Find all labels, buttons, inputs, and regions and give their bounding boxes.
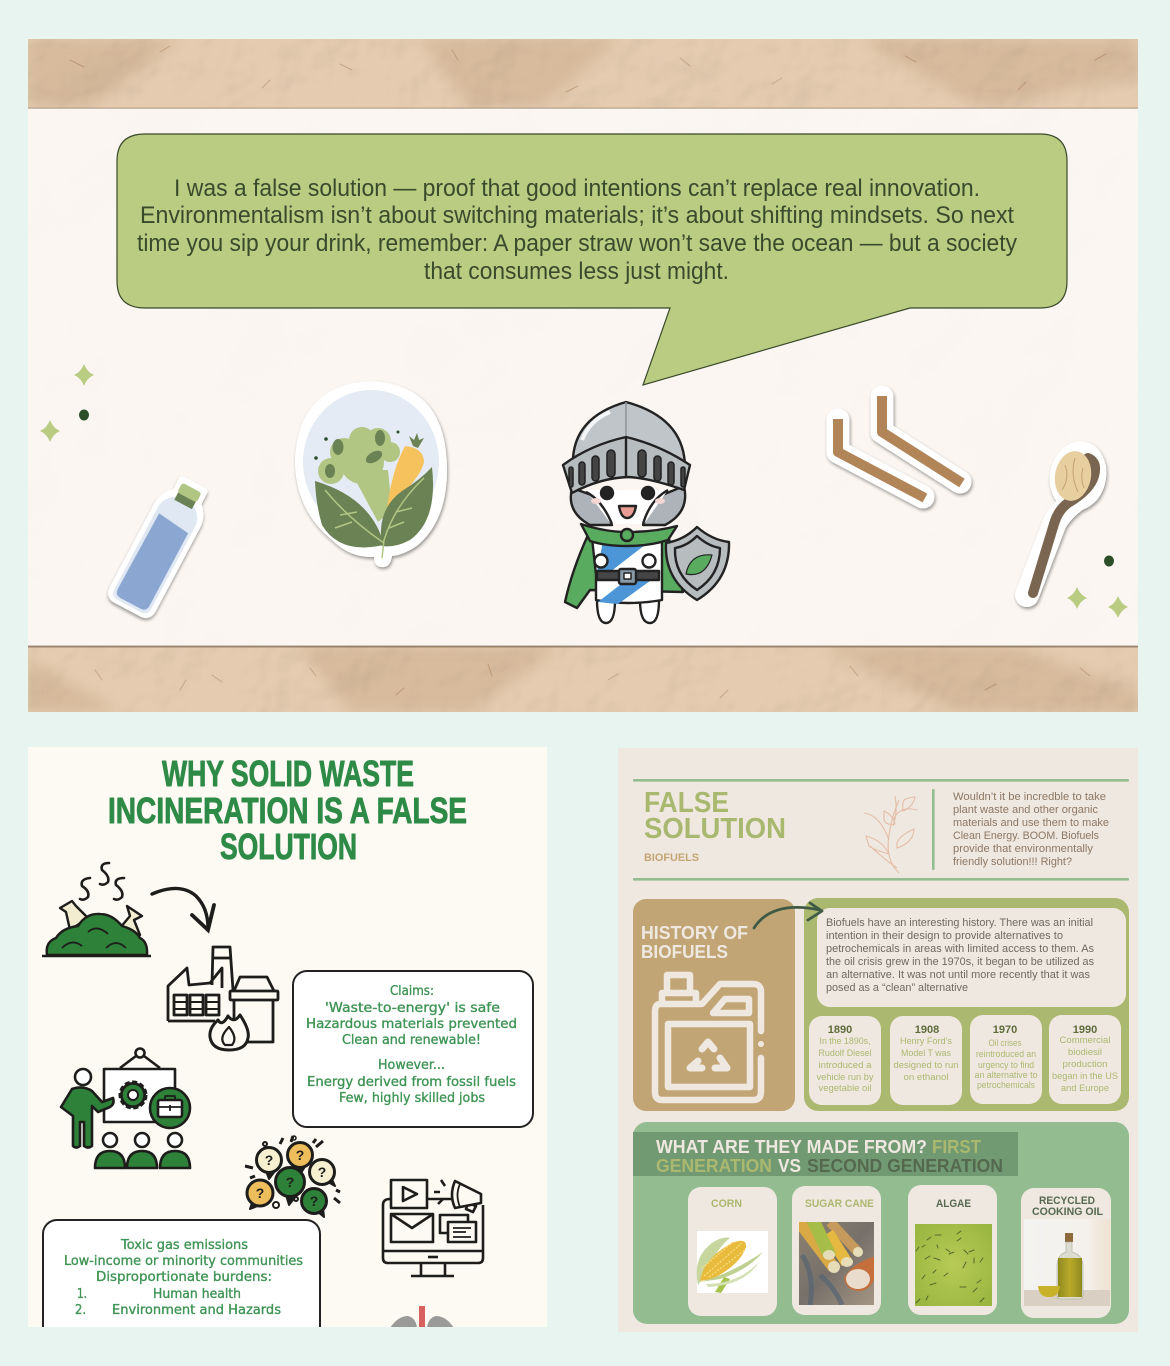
speech bubble: Environmentalism isn’t about switching materials; it’s about shifting mindsets. So next: [140, 202, 1014, 229]
claims callout: Few, highly skilled jobs: [339, 1091, 485, 1106]
card: 1990: Commercial: [1060, 1035, 1110, 1045]
panel: paper speech poster: [28, 39, 1138, 712]
icon: sparkles and dot left: [40, 364, 94, 442]
icon: recycled fuel jerrycan: [655, 975, 764, 1100]
card: 1970: petrochemicals: [977, 1080, 1035, 1090]
speech bubble: [117, 134, 1067, 385]
shield: [666, 527, 729, 600]
speech bubble: that consumes less just might.: [424, 258, 729, 285]
card: 1908: Model T was: [901, 1048, 951, 1058]
dome: [573, 402, 685, 468]
card: 1890: vehicle run by: [816, 1072, 874, 1082]
card: sugar cane: SUGAR CANE: [805, 1198, 874, 1210]
card: 1890: [809, 1016, 881, 1105]
intro text: Clean Energy. BOOM. Biofuels: [953, 830, 1099, 842]
hands: [594, 554, 608, 568]
header rules: [633, 779, 1129, 881]
consequences callout: Toxic gas emissions: [120, 1238, 248, 1253]
card: 1890: Rudolf Diesel: [818, 1048, 872, 1058]
icon: question speech bubbles: ?: [256, 1185, 264, 1201]
image: sugar cane with spoon: [798, 1220, 876, 1305]
card: 1990: biodiesil: [1068, 1047, 1102, 1057]
icon: question speech bubbles: ?: [310, 1193, 318, 1209]
consequences callout: Environment and Hazards: [112, 1303, 281, 1318]
card: algae: [908, 1185, 997, 1315]
intro text: materials and use them to make: [953, 817, 1109, 829]
belt: [597, 571, 659, 580]
consequences callout: Low-income or minority communities: [64, 1254, 303, 1269]
legs: [597, 600, 659, 623]
icon: digital marketing monitor: [383, 1180, 483, 1276]
card: 1970: 1970: [993, 1024, 1017, 1036]
consequences callout: 1.: [77, 1287, 87, 1302]
heading: false solution: [644, 787, 786, 864]
card: sugar cane: [792, 1186, 881, 1315]
consequences callout: Human health: [153, 1287, 241, 1302]
image: corn cob: [697, 1231, 768, 1293]
image: oil bottle: [1024, 1219, 1110, 1306]
heading: what are they made from: WHAT ARE THEY MADE FROM?: [656, 1137, 927, 1157]
consequences callout: 2.: [75, 1303, 86, 1318]
icon: water bottle sticker: [110, 476, 212, 616]
collar: [581, 524, 677, 546]
panel: solid waste incineration: [28, 747, 547, 1350]
intro text: plant waste and other organic: [953, 804, 1098, 816]
claims callout: However...: [378, 1058, 445, 1073]
panel: feedstocks: [633, 1122, 1129, 1324]
heading: false solution: SOLUTION: [644, 813, 786, 845]
visor: [563, 437, 690, 493]
icon: paper straws sticker: [838, 396, 962, 498]
card: recycled cooking oil: [1021, 1188, 1111, 1318]
panel: history timeline: [804, 898, 1129, 1111]
title: INCINERATION IS A FALSE: [108, 790, 467, 831]
panel: history of biofuels: BIOFUELS: [641, 942, 728, 962]
blue stripes: [597, 541, 650, 604]
history text box: Biofuels have an interesting history. There was an initial: [826, 917, 1093, 929]
broccoli: [318, 427, 400, 522]
cape: [565, 535, 683, 608]
icon: plant sprig: [864, 796, 917, 873]
card: 1908: 1908: [915, 1024, 939, 1036]
icon: vegetables sticker: [295, 381, 447, 567]
icon: garbage pile: [42, 863, 151, 956]
top kraft paper band: [28, 39, 1138, 109]
speech bubble: I was a false solution — proof that good intentions can’t replace real innovation.: [174, 175, 980, 202]
card: 1908: [890, 1016, 962, 1105]
card: algae: ALGAE: [936, 1198, 971, 1210]
intro text: Wouldn’t it be incredble to take: [953, 791, 1106, 803]
heading: what are they made from: VS: [778, 1156, 801, 1176]
body: [592, 538, 662, 603]
icon: incinerator factory: [168, 947, 278, 1050]
leaves: [315, 481, 384, 548]
card: 1990: [1049, 1015, 1121, 1104]
intro text: provide that environmentally: [953, 843, 1094, 855]
icon: question speech bubbles: ?: [265, 1152, 273, 1168]
history text box: an alternative. It was not until more recently that it was: [826, 969, 1090, 981]
card: 1970: urgency to find: [978, 1060, 1034, 1070]
cheek guards: [571, 486, 685, 525]
icon: sparkles and dot right: [1067, 556, 1128, 618]
speech bubble: time you sip your drink, remember: A paper straw won’t save the ocean — but a society: [137, 230, 1017, 257]
card: 1990: and Europe: [1061, 1083, 1109, 1093]
history text box: petrochemicals in areas with limited access to them. As: [826, 943, 1094, 955]
icon: spoon sticker: [1027, 442, 1107, 595]
claims callout: 'Waste-to-energy' is safe: [325, 1001, 500, 1016]
arrow: history to text: [754, 903, 822, 928]
card: 1990: began in the US: [1052, 1071, 1118, 1081]
panel: biofuels false solution: [618, 748, 1138, 1332]
icon: question speech bubbles: ?: [318, 1164, 326, 1180]
claims callout: [293, 971, 533, 1127]
consequences callout: Disproportionate burdens:: [96, 1270, 272, 1285]
title: WHY SOLID WASTE: [162, 753, 414, 794]
card: 1890: introduced a: [818, 1060, 872, 1070]
claims callout: Clean and renewable!: [342, 1033, 481, 1048]
title: [110, 760, 466, 860]
heading: what are they made from: [633, 1132, 1018, 1176]
history text box: posed as a “clean” alternative: [826, 982, 968, 994]
consequences callout: [42, 1219, 321, 1327]
card: recycled cooking oil: RECYCLED: [1039, 1195, 1095, 1207]
icon: lungs cropped: [390, 1306, 454, 1328]
heading: false solution: BIOFUELS: [644, 852, 699, 864]
heading: what are they made from: GENERATION: [656, 1156, 772, 1176]
card: 1990: production: [1062, 1059, 1108, 1069]
card: recycled cooking oil: COOKING OIL: [1032, 1206, 1103, 1218]
icon: question speech bubbles: ?: [296, 1147, 304, 1163]
arrow: waste to incinerator: [152, 888, 214, 930]
card: 1990: 1990: [1073, 1024, 1097, 1036]
heading: what are they made from: SECOND GENERATION: [807, 1156, 1003, 1176]
history text box: [817, 908, 1126, 1007]
history text box: intention in their design to provide alternatives to: [826, 930, 1063, 942]
card: 1970: [970, 1015, 1042, 1104]
card: 1970: an alternative to: [974, 1070, 1038, 1080]
icon: knight mascot: [563, 402, 729, 623]
title: SOLUTION: [220, 826, 357, 867]
carrot: [387, 446, 424, 508]
claims callout: Energy derived from fossil fuels: [307, 1075, 516, 1090]
card: 1908: Henry Ford’s: [900, 1036, 952, 1046]
card: 1890: vegetable oil: [818, 1083, 872, 1093]
face: [586, 490, 668, 524]
card: 1970: Oil crises: [988, 1038, 1022, 1048]
heading: what are they made from: FIRST: [932, 1137, 981, 1157]
heading: false solution: FALSE: [644, 787, 729, 819]
icon: question speech bubbles: [245, 1136, 340, 1217]
icon: presenter and audience: [61, 1048, 190, 1168]
history text box: the oil crisis grew in the 1970s, it began to be utilized as: [826, 956, 1094, 968]
kraft band creases: [28, 39, 1138, 712]
claims callout: Hazardous materials prevented: [306, 1017, 517, 1032]
card: corn: CORN: [711, 1198, 742, 1210]
claims callout: Claims:: [390, 984, 434, 999]
bottom kraft paper band: [28, 646, 1138, 712]
card: corn: [688, 1187, 777, 1316]
card: 1908: on ethanol: [904, 1072, 948, 1082]
image: green algae: [915, 1224, 992, 1306]
card: 1908: designed to run: [894, 1060, 958, 1070]
panel: history of biofuels: HISTORY OF: [641, 923, 748, 943]
white paper sheet: [28, 108, 1138, 646]
intro text: [953, 791, 1109, 868]
card: 1970: reintroduced an: [976, 1049, 1036, 1059]
intro text: friendly solution!!! Right?: [953, 856, 1072, 868]
card: 1890: In the 1890s,: [820, 1036, 870, 1046]
icon: question speech bubbles: ?: [286, 1174, 294, 1190]
card: 1890: 1890: [828, 1024, 852, 1036]
panel: history of biofuels: [633, 899, 795, 1111]
